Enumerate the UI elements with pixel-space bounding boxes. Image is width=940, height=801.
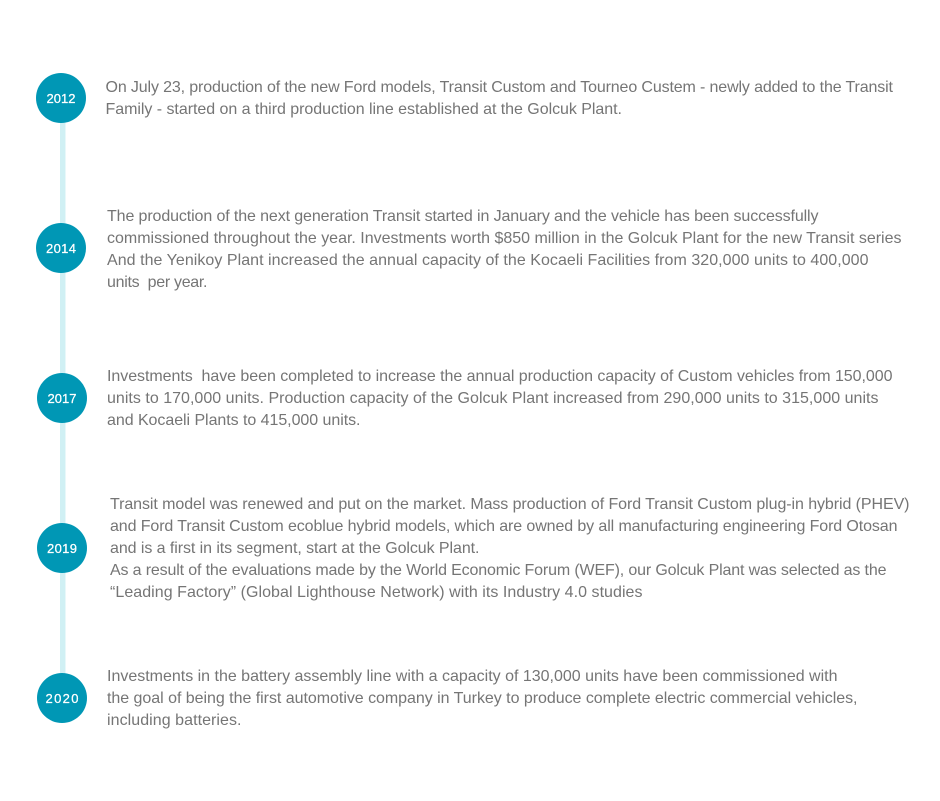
text: 2017 milestone: units to 170,000 units. Production capacity of the Golcuk Plant increased from 290,000 units to 315,000 units <box>107 390 878 407</box>
text: 2012 milestone <box>106 79 894 118</box>
text: 2014 milestone: And the Yenikoy Plant increased the annual capacity of the Kocaeli Facilities from 320,000 units to 400,000 <box>107 252 869 269</box>
text: 2012 milestone: On July 23, production of the new Ford models, Transit Custom and Tourneo Custem - newly added to the Transit <box>106 79 894 96</box>
marker: 2017 <box>37 373 87 423</box>
text: 2019 milestone: and Ford Transit Custom ecoblue hybrid models, which are owned by all manufacturing engineering Ford Otosan <box>110 518 898 535</box>
text: 2019 milestone: “Leading Factory” (Global Lighthouse Network) with its Industry 4.0 studies <box>110 584 642 601</box>
text: 2019 milestone: Transit model was renewed and put on the market. Mass production of Ford Transit Custom plug-in hybrid (PHEV) <box>110 496 910 513</box>
text: 2014 milestone <box>107 208 902 291</box>
text: 2014 milestone: units per year. <box>107 274 208 291</box>
marker: 2014 <box>36 223 86 273</box>
text: 2020 milestone: including batteries. <box>107 712 242 729</box>
text: 2020 milestone: the goal of being the first automotive company in Turkey to produce complete electric commercial vehicles, <box>107 690 858 707</box>
marker: 2014: 2014 <box>46 241 76 256</box>
text: 2019 milestone <box>110 496 910 601</box>
text: 2012 milestone: Family - started on a third production line established at the Golcuk Plant. <box>106 101 622 118</box>
text: 2017 milestone: Investments have been completed to increase the annual production capacity of Custom vehicles from 150,000 <box>107 368 893 385</box>
text: 2019 milestone: and is a first in its segment, start at the Golcuk Plant. <box>110 540 480 557</box>
text: 2017 milestone: and Kocaeli Plants to 415,000 units. <box>107 412 360 429</box>
marker: 2019: 2019 <box>47 541 77 556</box>
text: 2019 milestone: As a result of the evaluations made by the World Economic Forum (WEF), our Golcuk Plant was selected as the <box>110 562 887 579</box>
text: 2017 milestone <box>107 368 893 429</box>
timeline line <box>60 120 66 676</box>
marker: 2012: 2012 <box>46 91 76 106</box>
text: 2014 milestone: commissioned throughout the year. Investments worth $850 million in the Golcuk Plant for the new Transit series <box>107 230 902 247</box>
marker: 2012 <box>36 73 86 123</box>
text: 2014 milestone: The production of the next generation Transit started in January and the vehicle has been successfully <box>107 208 818 225</box>
text: 2020 milestone <box>107 668 858 729</box>
text: 2020 milestone: Investments in the battery assembly line with a capacity of 130,000 units have been commissioned with <box>107 668 838 685</box>
marker: 2017: 2017 <box>48 391 76 406</box>
marker: 2020 <box>37 673 87 723</box>
marker: 2020: 2020 <box>46 691 78 706</box>
marker: 2019 <box>37 523 87 573</box>
